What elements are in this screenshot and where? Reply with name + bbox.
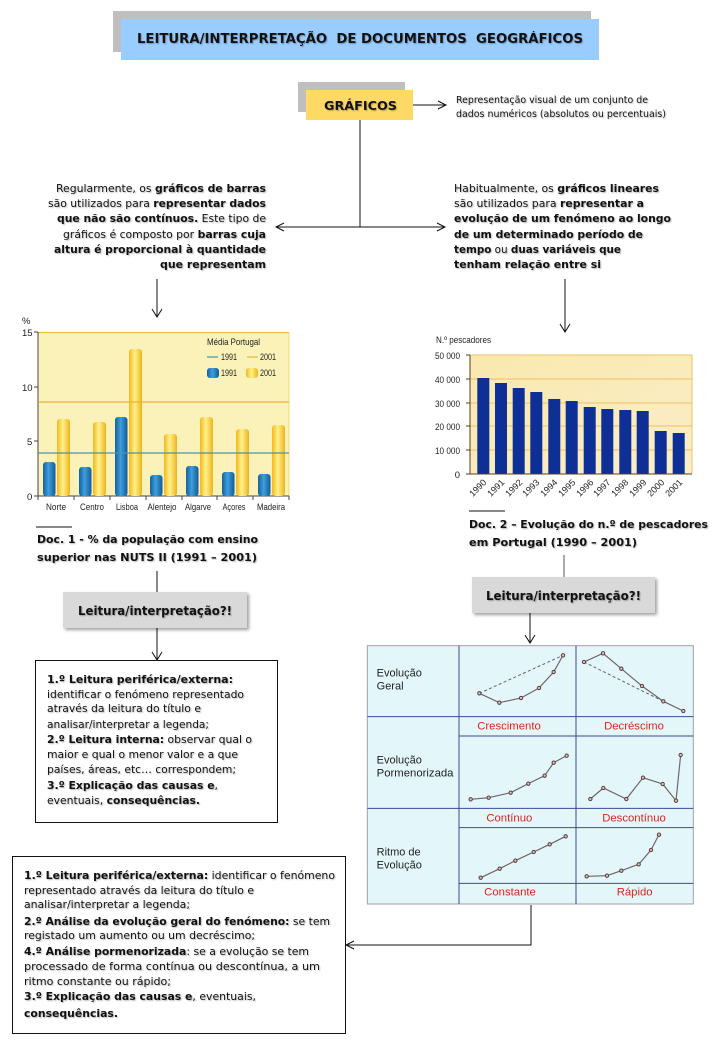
y axis labels: 5	[27, 437, 32, 448]
bars 2001	[57, 349, 285, 496]
caption: doc 2: Doc. 2 – Evolução do n.º de pescadores	[469, 518, 708, 531]
year labels: 1995	[556, 477, 577, 499]
red category labels: Contínuo	[486, 813, 532, 825]
panel: left reading steps	[36, 660, 278, 822]
y axis labels: 10 000	[435, 446, 460, 457]
y axis labels: 40 000	[435, 375, 460, 386]
caption: doc 2	[469, 511, 708, 549]
panel: left reading steps: 1.º Leitura periférica/externa:	[47, 673, 233, 686]
panel: left reading steps: identificar o fenómeno representado	[47, 688, 244, 701]
arrow: branches to both chart types	[276, 120, 445, 231]
heading: gráficos	[298, 82, 413, 120]
panel: bottom reading steps: analisar/interpretar a legenda;	[24, 898, 190, 911]
title banner	[113, 11, 599, 60]
year labels: 1997	[591, 477, 612, 499]
text: line charts description: são utilizados para representar a	[454, 197, 644, 210]
average lines	[38, 402, 289, 453]
text: bar charts description: que representam	[160, 258, 266, 271]
row labels	[377, 668, 454, 872]
bar chart: doc 1	[22, 316, 289, 512]
arrow: gráficos to definition	[413, 101, 446, 109]
panel: left reading steps: através da leitura do título e	[47, 702, 201, 715]
red category labels	[477, 720, 666, 898]
red category labels: Decréscimo	[604, 720, 664, 732]
panel: left reading steps: países, áreas, etc… correspondem;	[47, 763, 236, 776]
text: line charts description: tenham relação entre si	[454, 258, 601, 271]
panel: bottom reading steps: ritmo constante ou rápido;	[24, 975, 171, 988]
year labels	[467, 477, 684, 499]
year labels: 1998	[609, 477, 630, 499]
y axis labels	[22, 316, 33, 503]
bar chart: doc 2 fishermen: N.º pescadores	[436, 335, 491, 346]
legend: Média Portugal	[207, 337, 260, 347]
line sketches	[471, 653, 683, 878]
panel: bottom reading steps: 1.º Leitura periférica/externa: identificar o fenómeno	[24, 869, 335, 882]
category labels: Centro	[80, 502, 104, 512]
arrow: to bar chart	[152, 279, 162, 317]
row labels: Evolução	[377, 668, 422, 680]
panel: bottom reading steps: processado de forma contínua ou descontínua, a um	[24, 960, 320, 973]
year labels: 1994	[538, 477, 559, 499]
panel: bottom reading steps: registado um aumento ou um decréscimo;	[24, 929, 255, 942]
row labels: Ritmo de	[377, 846, 421, 858]
year labels: 1996	[574, 477, 595, 499]
row labels: Geral	[377, 680, 404, 692]
arrow: table to bottom text box	[346, 905, 531, 949]
panel: bottom reading steps: 3.º Explicação das causas e, eventuais,	[24, 990, 256, 1003]
text: bar charts description: altura é proporcional à quantidade	[54, 243, 266, 256]
arrow: leitura to left text box	[152, 628, 162, 660]
row labels: Evolução	[377, 755, 422, 767]
connector: doc 1 to leitura	[156, 571, 158, 592]
legend: 2001	[260, 352, 276, 362]
red category labels: Rápido	[617, 886, 653, 898]
bars 1991	[43, 417, 270, 496]
panel: left reading steps: maior e qual o menor valor e a que	[47, 748, 238, 761]
y axis labels: 15	[22, 328, 33, 339]
text: bar charts description: que não são contínuos. Este tipo de	[57, 212, 266, 225]
category labels: Açores	[222, 502, 246, 512]
panel: left reading steps: 2.º Leitura interna: observar qual o	[47, 733, 252, 746]
year labels: 2001	[663, 477, 684, 499]
category labels: Algarve	[185, 502, 211, 512]
bars	[477, 378, 685, 474]
y axis labels: %	[22, 316, 31, 327]
arrow: leitura to table	[525, 613, 535, 643]
caption: doc 2: em Portugal (1990 – 2001)	[469, 536, 637, 549]
y axis labels	[435, 351, 460, 481]
year labels: 1992	[503, 477, 524, 499]
panel: left reading steps: 3.º Explicação das causas e,	[47, 779, 218, 792]
panel: left reading steps: analisar/interpretar a legenda;	[47, 718, 209, 731]
panel: bottom reading steps: consequências.	[24, 1007, 118, 1020]
y axis labels: 30 000	[435, 399, 460, 410]
box: leitura left: Leitura/interpretação?!	[78, 604, 232, 618]
panel: bottom reading steps: 4.º Análise pormenorizada: se a evolução se tem	[24, 945, 309, 958]
category labels: Lisboa	[116, 502, 138, 512]
line sketch markers	[469, 652, 685, 879]
box: leitura left	[63, 592, 247, 628]
legend	[207, 337, 276, 378]
y axis labels: 10	[22, 383, 33, 394]
dashed trend lines	[479, 655, 663, 701]
panel: bottom reading steps	[12, 856, 346, 1034]
text: bar charts description: são utilizados para representar dados	[48, 197, 266, 210]
year labels: 1990	[467, 477, 488, 499]
connector: doc 2 to leitura	[563, 555, 565, 577]
box: leitura right	[472, 577, 655, 613]
panel: bottom reading steps: representado através da leitura do título e	[24, 884, 254, 897]
row labels: Pormenorizada	[377, 767, 454, 779]
legend: 1991	[221, 368, 237, 378]
legend: 1991	[221, 352, 237, 362]
y axis labels: 0	[455, 470, 460, 481]
caption: doc 1: Doc. 1 - % da população com ensino	[37, 533, 258, 546]
y axis labels: 50 000	[435, 351, 460, 362]
legend: 2001	[260, 368, 276, 378]
text: line charts description	[454, 182, 671, 271]
table: evolution types	[367, 646, 693, 904]
panel: left reading steps: eventuais, consequências.	[47, 794, 200, 807]
category labels: Madeira	[257, 502, 285, 512]
red category labels: Crescimento	[477, 720, 541, 732]
year labels: 1991	[485, 477, 506, 499]
caption: doc 1	[36, 527, 258, 564]
text: line charts description: evolução de um fenómeno ao longo	[454, 212, 671, 225]
bar chart: doc 2 fishermen	[435, 335, 692, 499]
caption: doc 1: superior nas NUTS II (1991 – 2001)	[37, 551, 257, 564]
text: line charts description: Habitualmente, os gráficos lineares	[454, 182, 659, 195]
box: leitura right: Leitura/interpretação?!	[486, 589, 641, 603]
text: definition: dados numéricos (absolutos ou percentuais)	[456, 108, 666, 120]
text: line charts description: de um determinado período de	[454, 228, 643, 241]
row labels: Evolução	[377, 860, 422, 872]
category labels	[46, 502, 285, 512]
text: line charts description: tempo ou duas variáveis que	[454, 243, 621, 256]
year labels: 1999	[627, 477, 648, 499]
y axis labels: 0	[27, 492, 32, 503]
red category labels: Descontínuo	[602, 813, 666, 825]
heading: gráficos: GRÁFICOS	[324, 98, 397, 113]
year labels: 1993	[520, 477, 541, 499]
category labels: Norte	[46, 502, 66, 512]
text: bar charts description	[48, 182, 266, 271]
text: bar charts description: Regularmente, os gráficos de barras	[56, 182, 266, 195]
text: definition: Representação visual de um conjunto de	[456, 95, 648, 106]
text: definition	[456, 95, 666, 120]
red category labels: Constante	[484, 886, 536, 898]
y axis labels: 20 000	[435, 422, 460, 433]
panel: bottom reading steps: 2.º Análise da evolução geral do fenómeno: se tem	[24, 915, 330, 928]
text: bar charts description: gráficos é composto por barras cuja	[63, 228, 266, 241]
year labels: 2000	[645, 477, 666, 499]
title banner: LEITURA/INTERPRETAÇÃO DE DOCUMENTOS GEOGRÁFICOS	[137, 31, 583, 47]
category labels: Alentejo	[148, 502, 176, 512]
arrow: to fishermen chart	[560, 279, 570, 332]
